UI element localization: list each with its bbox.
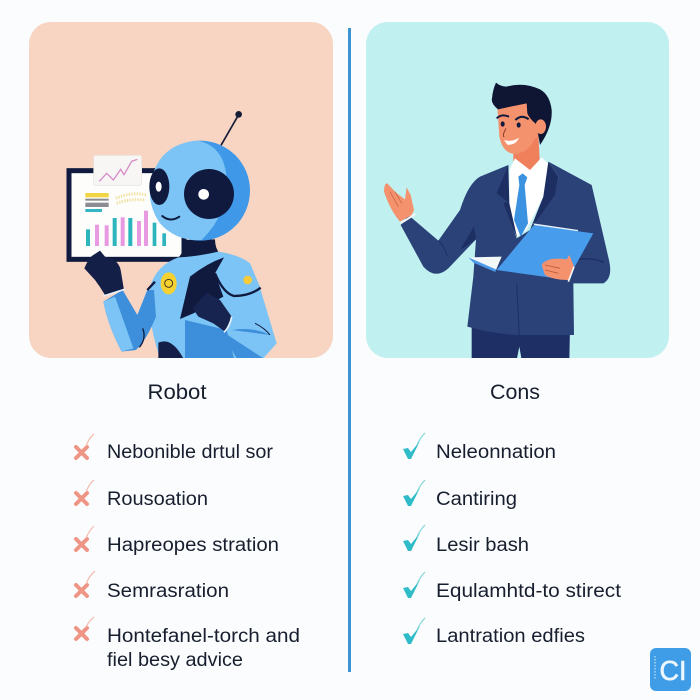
- robot head: [149, 141, 250, 241]
- robot body: [103, 239, 277, 358]
- item 3: Hapreopes stration: [107, 535, 279, 556]
- item 2: Cantiring: [436, 489, 517, 510]
- item 5: [403, 618, 585, 647]
- antenna: [221, 111, 242, 145]
- neck and collar: [509, 133, 548, 237]
- head: [492, 83, 552, 154]
- item 3: Lesir bash: [436, 535, 529, 556]
- item 5: Lantration edfies: [436, 626, 585, 647]
- hand holding folder: [542, 255, 574, 282]
- panel: robot illustration: [29, 22, 333, 358]
- logo badge: [650, 648, 691, 691]
- item 4: [76, 571, 229, 602]
- robot hands: [84, 251, 232, 332]
- logo badge: CI: [660, 655, 686, 686]
- chart card: [94, 155, 142, 185]
- panel: person illustration: [366, 22, 669, 360]
- heading: Cons: Cons: [490, 381, 540, 404]
- item 1: Nebonible drtul sor: [107, 442, 274, 463]
- item 4: [403, 572, 622, 602]
- item 5: [76, 617, 300, 671]
- list: cons items: [403, 433, 622, 647]
- icon: robot with chart tablet: [69, 111, 277, 358]
- item 2: Rousoation: [107, 489, 208, 510]
- item 2: [403, 480, 517, 510]
- item 5: Hontefanel-torch and: [107, 626, 300, 647]
- item 4: Semrasration: [107, 581, 229, 602]
- tablet with bar chart: [69, 171, 184, 259]
- folder: [468, 223, 593, 280]
- item 2: [76, 480, 208, 510]
- item 3: [76, 526, 279, 556]
- tie: [514, 173, 528, 237]
- suit jacket: [401, 162, 610, 335]
- icon: businessman with folder: [384, 83, 610, 360]
- list: robot items: [76, 434, 300, 671]
- item 3: [403, 525, 529, 556]
- trousers: [472, 327, 570, 360]
- item 4: Equlamhtd-to stirect: [436, 581, 622, 602]
- item 1: Neleonnation: [436, 442, 556, 463]
- heading: Robot: Robot: [148, 381, 207, 404]
- item 5: fiel besy advice: [107, 650, 243, 671]
- item 1: [76, 434, 274, 463]
- item 1: [403, 433, 556, 463]
- raised hand: [384, 183, 415, 223]
- divider: [348, 28, 351, 672]
